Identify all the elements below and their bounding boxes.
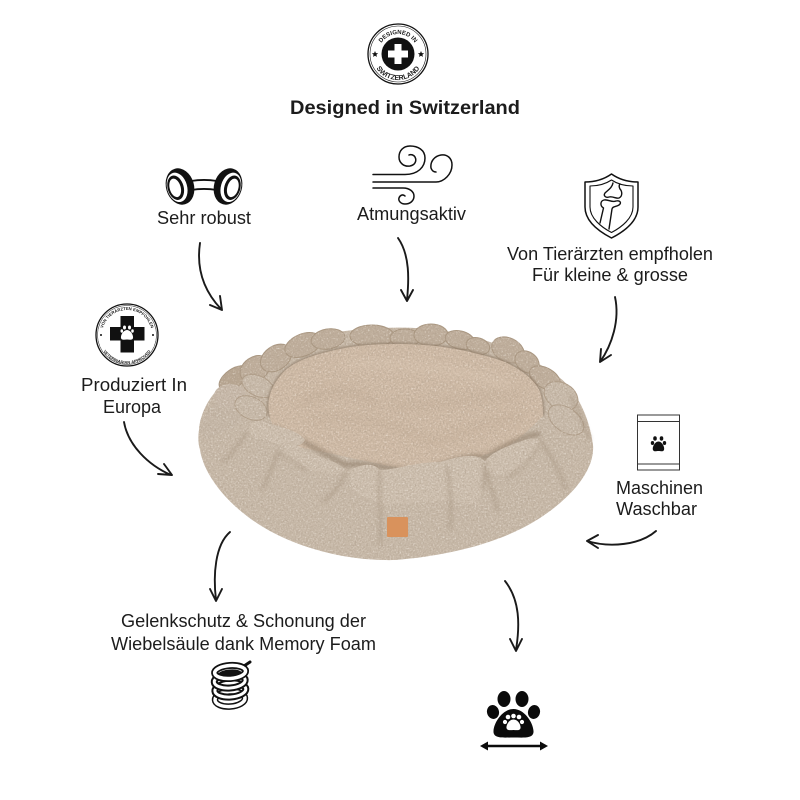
label: Sehr robust: Sehr robust	[157, 208, 251, 228]
label: Atmungsaktiv: Atmungsaktiv	[357, 204, 466, 224]
label: Von Tierärzten empfholen, Für kleine und grosse	[507, 244, 713, 285]
arrow: Waschbar to bed	[587, 531, 656, 548]
rim ruffles, sides	[231, 370, 589, 441]
label: Gelenkschutz und Wirbelsäule	[111, 611, 376, 654]
label: Gelenkschutz und Wirbelsäule: Gelenkschutz & Schonung der	[121, 611, 366, 631]
badge: veterinarian approved: VETERINARIAN APPROVED	[104, 350, 150, 364]
badge: veterinarian approved: VON TIERÄRZTEN EMPFOHLEN	[100, 307, 154, 328]
badge: designed in Switzerland: DESIGNED IN	[378, 30, 418, 42]
bed seat cushion	[268, 344, 543, 470]
icon: dumbbell	[161, 165, 247, 208]
icon: washable bag	[638, 415, 680, 470]
label: Produziert In Europa: Produziert In	[81, 375, 187, 395]
label: Von Tierärzten empfholen, Für kleine und grosse: Von Tierärzten empfholen	[507, 244, 713, 264]
label: Produziert In Europa	[81, 375, 187, 417]
label: Maschinen Waschbar: Maschinen	[616, 478, 703, 498]
orange leather tag	[387, 517, 408, 537]
product photo: round fleece dog bed	[198, 324, 593, 560]
arrow: Atmungsaktiv to bed	[398, 238, 413, 301]
icon: paw with size arrow	[480, 691, 548, 750]
icon: wind	[373, 146, 452, 204]
label: Von Tierärzten empfholen, Für kleine und grosse: Für kleine & grosse	[532, 265, 688, 285]
bed outer body	[198, 328, 593, 560]
icon: coil spring	[213, 662, 250, 708]
bed rim ruffles, back	[199, 324, 565, 440]
seat fold shading	[300, 364, 525, 442]
body ruffle creases	[222, 395, 590, 545]
arrow: bed to paw size	[505, 581, 522, 651]
label: Produziert In Europa: Europa	[103, 397, 162, 417]
arrow: Sehr robust to bed	[199, 243, 222, 310]
front fold shadow	[252, 425, 540, 472]
arrow: Tierärzten to bed	[600, 297, 617, 362]
label: Maschinen Waschbar	[616, 478, 703, 519]
front rim folds	[249, 421, 542, 505]
badge: designed in Switzerland: SWITZERLAND	[377, 66, 419, 80]
heading: Designed in Switzerland	[290, 97, 520, 119]
badge: designed in Switzerland	[367, 23, 429, 85]
label: Gelenkschutz und Wirbelsäule: Wiebelsäule dank Memory Foam	[111, 634, 376, 654]
label: Maschinen Waschbar: Waschbar	[616, 499, 697, 519]
icon: shield with knee joint	[585, 174, 638, 238]
seat shadow edge	[268, 344, 543, 417]
arrow: Europa to bed	[124, 422, 172, 475]
badge: veterinarian approved	[95, 303, 159, 367]
arrow: bed to Gelenkschutz	[210, 532, 230, 601]
